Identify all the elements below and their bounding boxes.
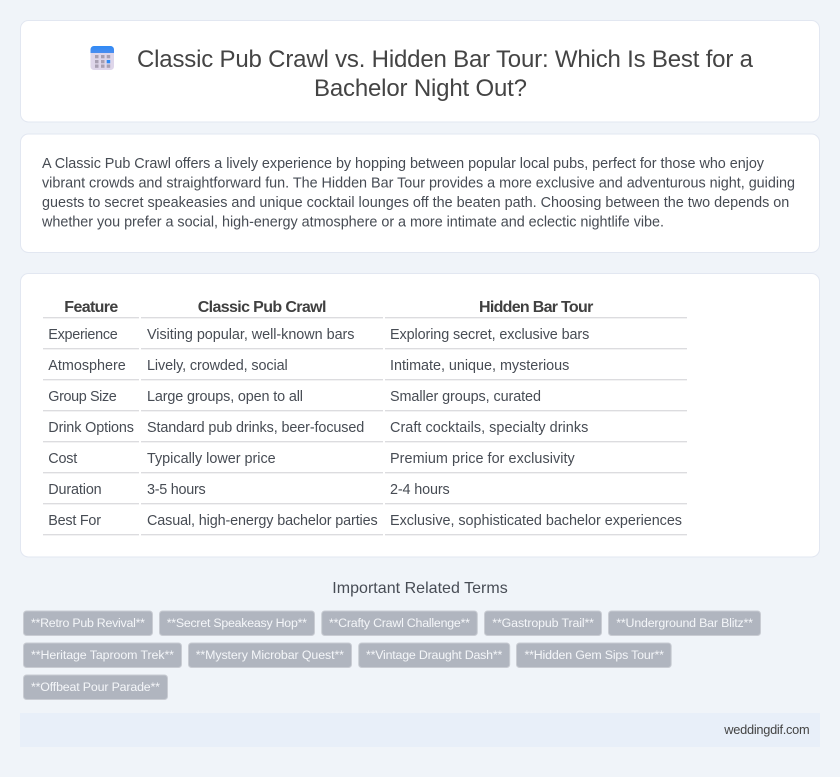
panel: description xyxy=(20,134,820,252)
icon: calendar xyxy=(90,46,114,70)
table row: Best For xyxy=(48,513,682,529)
table row: Atmosphere: Lively, crowded, social xyxy=(147,358,288,374)
tag: Crafty Crawl Challenge: **Crafty Crawl Challenge** xyxy=(329,616,470,630)
table row: Best For: Best For xyxy=(48,513,101,529)
tag: Hidden Gem Sips Tour xyxy=(516,643,671,668)
table header row: Feature xyxy=(64,299,118,316)
table row: Cost: Cost xyxy=(48,451,77,467)
tag: Mystery Microbar Quest xyxy=(188,643,352,668)
title: Classic Pub Crawl vs. Hidden Bar Tour: Which Is Best for a xyxy=(137,46,754,73)
text block: description xyxy=(41,156,795,230)
title: Bachelor Night Out? xyxy=(314,75,527,102)
panel: title header xyxy=(20,20,820,122)
table row: Atmosphere xyxy=(48,358,569,374)
table row: Drink Options xyxy=(48,420,588,436)
table row: Experience: Exploring secret, exclusive bars xyxy=(390,327,589,343)
tag: Heritage Taproom Trek: **Heritage Taproom Trek** xyxy=(31,648,174,662)
heading: Important Related Terms: Important Related Terms xyxy=(332,580,508,597)
tag: Underground Bar Blitz: **Underground Bar Blitz** xyxy=(616,616,753,630)
table row: Best For: Casual, high-energy bachelor parties xyxy=(147,513,378,529)
table row: Atmosphere: Intimate, unique, mysterious xyxy=(390,358,569,374)
table row: Experience xyxy=(48,327,589,343)
table row: Group Size: Group Size xyxy=(48,389,117,405)
table row: Group Size: Large groups, open to all xyxy=(147,389,303,405)
table row: Group Size xyxy=(48,389,541,405)
tag: Retro Pub Revival xyxy=(24,611,152,636)
tag: Hidden Gem Sips Tour: **Hidden Gem Sips Tour** xyxy=(524,648,664,662)
table row: Cost: Premium price for exclusivity xyxy=(390,451,575,467)
table row: Best For: Exclusive, sophisticated bachelor experiences xyxy=(390,513,682,529)
table row: Experience: Experience xyxy=(48,327,118,343)
tag: Secret Speakeasy Hop: **Secret Speakeasy Hop** xyxy=(167,616,307,630)
table row: Atmosphere: Atmosphere xyxy=(48,358,126,374)
footer: source: weddingdif.com xyxy=(723,722,810,737)
related terms tags xyxy=(24,611,760,700)
panel: comparison table xyxy=(20,274,820,557)
table header row: Hidden Bar Tour xyxy=(479,299,593,316)
table row: Duration: Duration xyxy=(48,482,102,498)
tag: Vintage Draught Dash: **Vintage Draught Dash** xyxy=(366,648,502,662)
tag: Crafty Crawl Challenge xyxy=(322,611,477,636)
tag: Retro Pub Revival: **Retro Pub Revival** xyxy=(31,616,145,630)
tag: Heritage Taproom Trek xyxy=(24,643,182,668)
text block: description: vibrant crowds and straightforward fun. The Hidden Bar Tour provides a more exclusive and adventurous night, guiding xyxy=(42,176,795,192)
text block: description: guests to secret speakeasies and unique cocktail lounges off the beaten path. Choosing between the two depends on xyxy=(42,195,789,211)
table row: Duration xyxy=(48,482,450,498)
tag: Offbeat Pour Parade: **Offbeat Pour Parade** xyxy=(31,680,160,694)
table row: Experience: Visiting popular, well-known bars xyxy=(147,327,354,343)
text block: description: whether you prefer a social, high-energy atmosphere or a more intimate and eclectic nightlife vibe. xyxy=(41,214,664,230)
tag: Offbeat Pour Parade xyxy=(24,675,168,700)
table row: Drink Options: Drink Options xyxy=(48,420,134,436)
tag: Gastropub Trail xyxy=(484,611,602,636)
table header row: Classic Pub Crawl xyxy=(198,299,326,316)
table row: Duration: 2-4 hours xyxy=(390,482,450,498)
text block: description: A Classic Pub Crawl offers a lively experience by hopping between popular local pubs, perfect for those who enjoy xyxy=(42,156,765,172)
footer bar xyxy=(20,713,820,747)
table row: Cost: Typically lower price xyxy=(147,451,276,467)
table row: Duration: 3-5 hours xyxy=(147,482,206,498)
tag: Secret Speakeasy Hop xyxy=(160,611,314,636)
table header row xyxy=(64,299,593,316)
table row: Cost xyxy=(48,451,575,467)
tag: Gastropub Trail: **Gastropub Trail** xyxy=(492,616,594,630)
tag: Vintage Draught Dash xyxy=(359,643,510,668)
table row: Group Size: Smaller groups, curated xyxy=(390,389,541,405)
title xyxy=(137,46,754,102)
table row: Drink Options: Standard pub drinks, beer-focused xyxy=(147,420,364,436)
tag: Mystery Microbar Quest: **Mystery Microbar Quest** xyxy=(196,648,344,662)
tag: Underground Bar Blitz xyxy=(608,611,760,636)
table row: Drink Options: Craft cocktails, specialty drinks xyxy=(390,420,588,436)
